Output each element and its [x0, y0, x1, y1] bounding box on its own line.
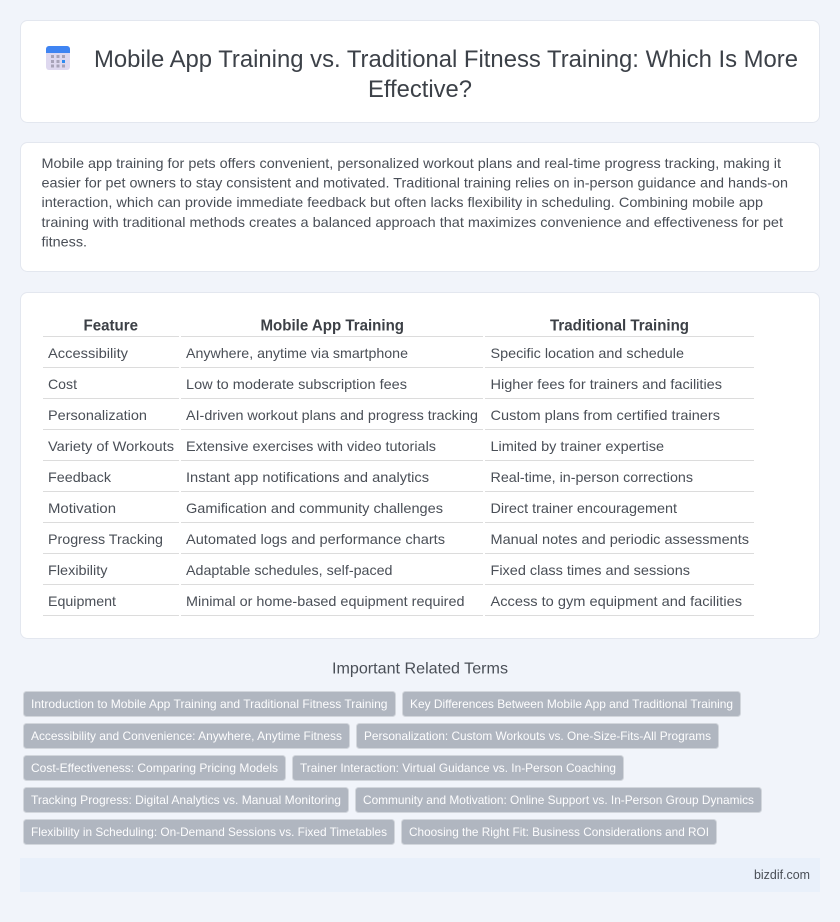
footer: [20, 858, 820, 892]
row: feedback: Feedback: [48, 469, 112, 485]
row: equipment: Minimal or home-based equipment required: [186, 593, 464, 609]
row: personalization: Custom plans from certified trainers: [490, 407, 720, 423]
row: variety of workouts: Extensive exercises with video tutorials: [186, 438, 436, 454]
row: cost: Low to moderate subscription fees: [186, 376, 407, 392]
panel: related term tags: Personalization: Custom Workouts vs. One-Size-Fits-All Programs: [364, 729, 711, 743]
row: personalization: [48, 407, 720, 423]
text block: introduction paragraph: Mobile app training for pets offers convenient, personalized workout plans and real-time progress tracking, making it: [42, 155, 781, 171]
row: progress tracking: Manual notes and periodic assessments: [490, 531, 749, 547]
row: variety of workouts: [48, 438, 664, 454]
row: flexibility: Adaptable schedules, self-paced: [186, 562, 392, 578]
text block: introduction paragraph: training with traditional methods creates a balanced approach that maximizes convenience and effectiveness for pet: [42, 214, 783, 230]
title: Effective?: [368, 76, 472, 103]
row: flexibility: Fixed class times and sessions: [490, 562, 690, 578]
row: feedback: Instant app notifications and analytics: [186, 469, 429, 485]
panel: related term tags: Choosing the Right Fit: Business Considerations and ROI: [409, 825, 709, 839]
row: feedback: Real-time, in-person corrections: [490, 469, 693, 485]
row: equipment: [48, 593, 742, 609]
row: motivation: [48, 500, 677, 516]
row: personalization: Personalization: [48, 407, 147, 423]
row: flexibility: Flexibility: [48, 562, 108, 578]
row: variety of workouts: Variety of Workouts: [48, 438, 174, 454]
panel: related term tags: Community and Motivation: Online Support vs. In-Person Group Dynamics: [363, 793, 754, 807]
row: accessibility: Anywhere, anytime via smartphone: [186, 345, 408, 361]
panel: related term tags: [24, 692, 762, 844]
row: flexibility: [48, 562, 690, 578]
title: Mobile App Training vs. Traditional Fitness Training: Which Is More: [94, 46, 798, 73]
row: variety of workouts: Limited by trainer expertise: [490, 438, 664, 454]
table header row: Feature: [84, 318, 138, 335]
row: motivation: Direct trainer encouragement: [490, 500, 677, 516]
row: feedback: [48, 469, 693, 485]
row: progress tracking: Progress Tracking: [48, 531, 163, 547]
text block: introduction paragraph: [42, 155, 788, 249]
panel: related term tags: Cost-Effectiveness: Comparing Pricing Models: [31, 761, 278, 775]
panel: related term tags: Key Differences Between Mobile App and Traditional Training: [410, 697, 733, 711]
text block: introduction paragraph: interaction, which can provide immediate feedback but often lacks flexibility in scheduling. Combining mobile app: [42, 194, 763, 210]
heading: important related terms: Important Related Terms: [332, 660, 508, 678]
row: equipment: Access to gym equipment and facilities: [490, 593, 742, 609]
panel: comparison table: [20, 292, 820, 638]
row: cost: Higher fees for trainers and facilities: [490, 376, 722, 392]
row: equipment: Equipment: [48, 593, 116, 609]
table header row: Traditional Training: [550, 318, 689, 335]
icon: calendar app: [46, 46, 70, 70]
row: cost: Cost: [48, 376, 77, 392]
panel: related term tags: Flexibility in Scheduling: On-Demand Sessions vs. Fixed Timetables: [31, 825, 387, 839]
row: progress tracking: Automated logs and performance charts: [186, 531, 445, 547]
row: motivation: Motivation: [48, 500, 116, 516]
row: personalization: AI-driven workout plans and progress tracking: [186, 407, 478, 423]
row: cost: [48, 376, 722, 392]
row: motivation: Gamification and community challenges: [186, 500, 443, 516]
table header row: Mobile App Training: [260, 318, 404, 335]
text block: introduction paragraph: easier for pet owners to stay consistent and motivated. Traditional training relies on in-person guidance and hands-on: [42, 175, 788, 191]
panel: title header: [20, 20, 820, 122]
table header row: [84, 318, 689, 335]
panel: related term tags: Accessibility and Convenience: Anywhere, Anytime Fitness: [31, 729, 342, 743]
footer: bizdif.com: [754, 867, 810, 882]
row: accessibility: Accessibility: [48, 345, 128, 361]
panel: related term tags: Trainer Interaction: Virtual Guidance vs. In-Person Coaching: [300, 761, 616, 775]
row: accessibility: [48, 345, 684, 361]
title: [94, 46, 798, 103]
panel: related term tags: Tracking Progress: Digital Analytics vs. Manual Monitoring: [31, 793, 341, 807]
row: accessibility: Specific location and schedule: [490, 345, 684, 361]
panel: related term tags: Introduction to Mobile App Training and Traditional Fitness Training: [31, 697, 388, 711]
text block: introduction paragraph: fitness.: [42, 233, 87, 249]
panel: introduction: [20, 142, 820, 272]
row: progress tracking: [48, 531, 749, 547]
